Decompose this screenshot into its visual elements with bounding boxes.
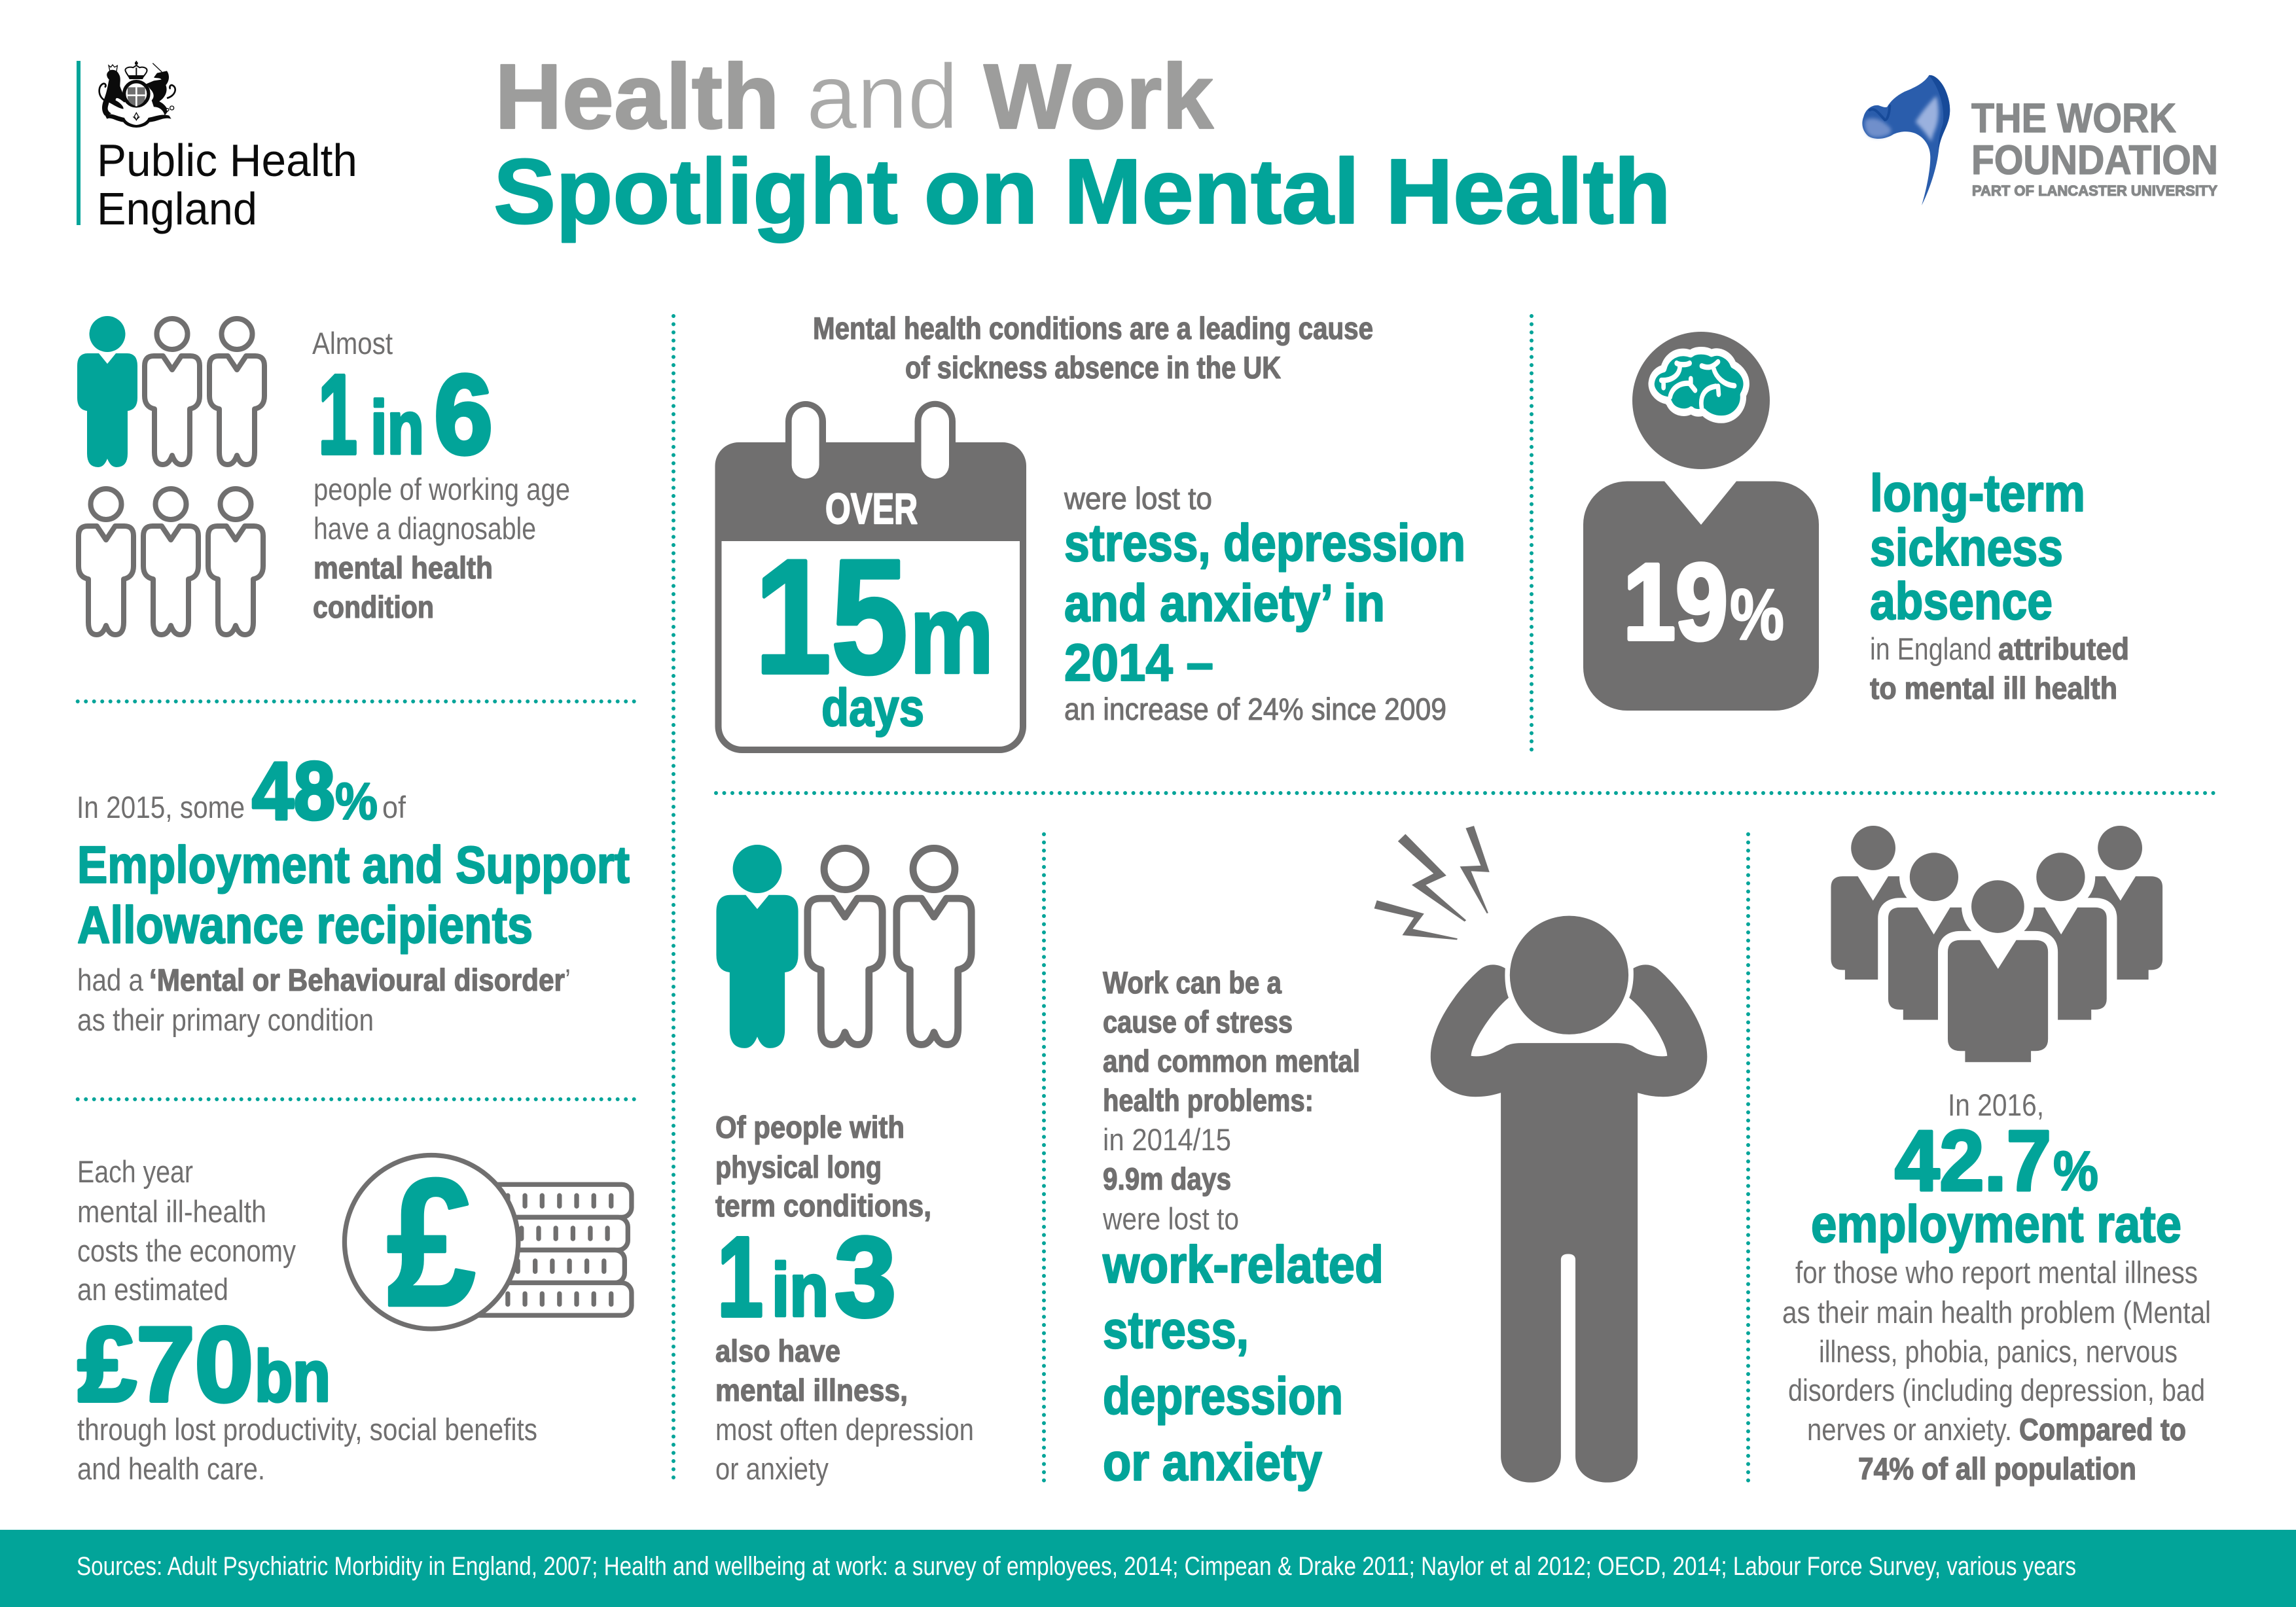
text: description: people of working age xyxy=(314,472,570,506)
panel: sickness absence xyxy=(715,311,1465,750)
text: description xyxy=(77,1412,537,1486)
stat: 19%: % xyxy=(1730,574,1784,655)
stat line: 48%: % xyxy=(335,772,378,830)
stat: 1 in 6: in xyxy=(370,386,424,470)
stat: £70bn: £70 xyxy=(78,1305,253,1424)
text: in 2016: In 2016, xyxy=(1948,1087,2044,1122)
heading: leading cause xyxy=(813,311,1373,385)
footer: sources xyxy=(0,1530,2296,1607)
stat: 1 in 3: 1 xyxy=(717,1213,763,1340)
text: description: as their main health problem (Mental xyxy=(1782,1295,2211,1330)
heading: work-related stress: depression xyxy=(1103,1367,1343,1425)
text: intro: Work can be a xyxy=(1103,965,1282,1000)
text: days lost description xyxy=(1064,481,1465,726)
text: description: condition xyxy=(313,590,434,624)
heading: work-related stress: or anxiety xyxy=(1103,1433,1322,1491)
logo text: THE WORK xyxy=(1971,96,2176,141)
text: description: through lost productivity, social benefits xyxy=(77,1412,537,1447)
text: long-term sickness absence: attributed xyxy=(1998,631,2129,666)
text: intro: mental ill-health xyxy=(77,1194,266,1229)
text: description: mental health xyxy=(314,550,493,585)
icon: blue swoosh xyxy=(1862,75,1950,205)
heading: work-related stress: stress, xyxy=(1103,1301,1249,1359)
panel: 1 in 3 xyxy=(715,845,974,1486)
logo text: England xyxy=(97,183,257,234)
text: description xyxy=(715,1333,974,1486)
text: description: have a diagnosable xyxy=(314,511,536,546)
icon: six people, one highlighted xyxy=(77,316,264,635)
panel: 1 in 6 xyxy=(77,316,570,635)
stat: 19%: 19 xyxy=(1623,542,1728,663)
stat: 1 in 3: in xyxy=(772,1248,829,1332)
heading: employment rate: employment rate xyxy=(1811,1195,2181,1253)
text: intro: were lost to xyxy=(1102,1201,1239,1236)
text: description xyxy=(1782,1255,2211,1486)
text: intro: costs the economy xyxy=(77,1233,296,1268)
text: intro: term conditions, xyxy=(715,1188,931,1223)
heading: ESA recipients: Allowance recipients xyxy=(77,896,533,954)
stat: 1 in 6: 6 xyxy=(434,351,493,478)
text: intro: Each year xyxy=(77,1154,193,1189)
heading: work-related stress: work-related xyxy=(1102,1235,1384,1294)
text: description: Compared to xyxy=(2019,1412,2186,1447)
stat line: 48%: 48 xyxy=(252,746,335,837)
text: description: nerves or anxiety. xyxy=(1807,1412,2012,1447)
calendar text: days: days xyxy=(821,679,924,737)
text: intro: 9.9m days xyxy=(1103,1161,1231,1196)
panel: employment rate xyxy=(1782,826,2211,1486)
icon: group of five people xyxy=(1831,826,2162,1062)
text: description: for those who report mental illness xyxy=(1795,1255,2198,1290)
panel: 19% long-term sickness xyxy=(1583,332,2129,711)
heading: leading cause: of sickness absence in the UK xyxy=(905,350,1281,385)
icon: person with brain xyxy=(1583,332,1819,711)
text: intro: and common mental xyxy=(1103,1044,1360,1078)
logo text xyxy=(97,135,357,234)
stat: £70bn: bn xyxy=(255,1336,331,1417)
title xyxy=(493,44,1671,243)
text: description: most often depression xyxy=(715,1412,974,1447)
calendar stat: 15m: m xyxy=(910,573,994,697)
icon: pound coin and stack: £ xyxy=(387,1140,476,1344)
calendar text: over: OVER xyxy=(825,484,918,533)
stat: 1 in 3: 3 xyxy=(834,1213,896,1340)
icon: three people, one highlighted xyxy=(716,845,971,1048)
text: description: as their primary condition xyxy=(77,1002,374,1037)
title: and xyxy=(806,44,958,148)
icon: calendar xyxy=(715,401,1026,750)
icon: pound coin and stack xyxy=(344,1140,632,1344)
panel: work-related stress xyxy=(1102,826,1707,1491)
text: description: disorders (including depression, bad xyxy=(1788,1373,2205,1407)
text: days lost description: 2014 – xyxy=(1064,633,1213,692)
logo text: Public Health xyxy=(97,135,357,186)
logo: Public Health England xyxy=(77,61,357,234)
text: days lost description: were lost to xyxy=(1064,481,1212,516)
text: intro: Of people with xyxy=(715,1110,905,1144)
heading: ESA recipients xyxy=(77,836,630,954)
text: long-term sickness absence: to mental ill health xyxy=(1870,671,2117,705)
text: description: illness, phobia, panics, nervous xyxy=(1819,1334,2178,1369)
stat line: 48%: of xyxy=(382,790,406,824)
title: Health xyxy=(495,44,780,148)
logo text xyxy=(1971,96,2218,199)
text: intro: health problems: xyxy=(1103,1083,1314,1118)
panel: 48% ESA recipients xyxy=(77,746,630,1037)
text: description: or anxiety xyxy=(715,1451,829,1486)
calendar stat: 15m: 15 xyxy=(755,525,908,707)
text: days lost description: stress, depression xyxy=(1064,514,1465,572)
text: description: ’ xyxy=(565,962,571,997)
text: long-term sickness absence xyxy=(1870,464,2129,705)
logo text: PART OF LANCASTER UNIVERSITY xyxy=(1972,183,2217,199)
text: long-term sickness absence: in England xyxy=(1870,631,1992,666)
logo: The Work Foundation xyxy=(1862,75,2218,205)
heading: leading cause: Mental health conditions are a leading cause xyxy=(813,311,1373,345)
stat: 42.7%: % xyxy=(2053,1140,2098,1203)
stat line: 48%: In 2015, some xyxy=(77,790,245,824)
text: almost: Almost xyxy=(312,326,393,361)
icon: stressed person holding head xyxy=(1374,826,1707,1483)
text: intro: cause of stress xyxy=(1103,1004,1293,1039)
text: intro: in 2014/15 xyxy=(1103,1122,1231,1157)
text: days lost description: an increase of 24% since 2009 xyxy=(1064,692,1446,726)
text: intro xyxy=(715,1110,931,1223)
text: long-term sickness absence: absence xyxy=(1870,572,2053,630)
stat: 1 in 6 xyxy=(318,351,493,478)
text: days lost description: and anxiety’ in xyxy=(1064,574,1385,632)
text: intro xyxy=(77,1154,296,1307)
text: long-term sickness absence: sickness xyxy=(1870,518,2063,576)
title: Spotlight on Mental Health xyxy=(493,139,1671,243)
heading: work-related stress xyxy=(1102,1235,1384,1491)
stat: 1 in 3 xyxy=(717,1213,896,1340)
panel: £70bn cost xyxy=(77,1140,632,1486)
title: Work xyxy=(984,44,1214,148)
text: description: and health care. xyxy=(77,1451,265,1486)
stat: 42.7%: 42.7 xyxy=(1895,1112,2051,1209)
heading: ESA recipients: Employment and Support xyxy=(77,836,630,894)
text: description: 74% of all population xyxy=(1858,1451,2136,1486)
logo text: FOUNDATION xyxy=(1971,137,2218,183)
stat: 1 in 6: 1 xyxy=(318,351,357,478)
text: description: mental illness, xyxy=(715,1373,908,1407)
text: intro xyxy=(1102,965,1360,1236)
stat line: 48% xyxy=(77,746,406,837)
text: long-term sickness absence: long-term xyxy=(1870,464,2085,522)
text: description: also have xyxy=(715,1333,840,1368)
text: description xyxy=(313,472,570,624)
text: description: had a xyxy=(77,962,144,997)
text: description: ‘Mental or Behavioural disorder xyxy=(149,962,565,997)
icon: brain xyxy=(1651,351,1746,419)
text: intro: physical long xyxy=(715,1150,882,1184)
text: description xyxy=(77,962,571,1037)
icon: royal crest xyxy=(99,61,175,128)
text: intro: an estimated xyxy=(77,1272,228,1307)
